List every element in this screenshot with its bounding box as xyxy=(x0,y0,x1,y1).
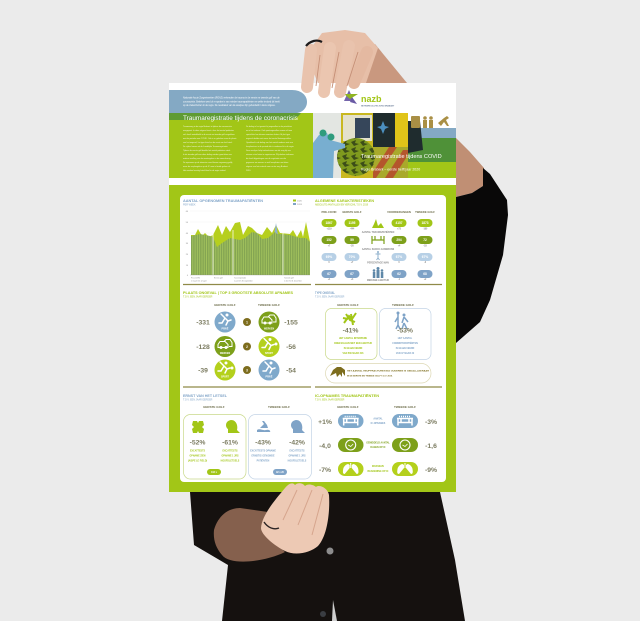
card: tweede golf: HOOFDLETSELS xyxy=(288,460,307,462)
row: mediane leeftijd: 67 xyxy=(350,272,354,276)
row: aantal shockroom: 59 xyxy=(350,238,354,242)
row: percentage man: -3 xyxy=(424,262,427,264)
panel: header intro xyxy=(169,90,313,178)
row: aantal traumapatienten: AANTAL TRAUMAPATIËNTEN xyxy=(362,231,395,234)
intro column left: aangepast. In deze uitgave leest u hoe het aantal patiënten xyxy=(183,129,234,132)
row: ic-opnames: AANTAL xyxy=(373,418,383,420)
row: aantal traumapatienten xyxy=(322,219,432,234)
logo: nazb xyxy=(361,94,382,104)
callout: fractures: IN DE EERSTE EN TWEEDE GOLF T.O.V. 2019. xyxy=(347,376,393,378)
intro column left: In de tweede golf was deze daling minder groot door een xyxy=(183,153,232,156)
row: percentage man: 69% xyxy=(326,255,332,259)
logo: NETWERK ACUTE ZORG BRABANT xyxy=(361,104,395,108)
card: eerste golf: -52% xyxy=(190,440,205,446)
row: aantal traumapatienten: -180 xyxy=(423,228,428,230)
card: tweede golf: EXCATTESTS xyxy=(289,450,305,452)
intro column left: Het aandeel ernstig letsel bleef in de regio stabiel. xyxy=(183,169,226,172)
row: mediane leeftijd xyxy=(322,267,432,282)
bar chart: Pre-COVID xyxy=(191,278,201,280)
intro column right: 2020. xyxy=(246,170,251,172)
bar chart: 60 xyxy=(186,211,189,213)
heading: ERNST VAN HET LETSEL xyxy=(183,394,228,398)
rank 3: PRIVÉ xyxy=(266,376,273,378)
column labels: VOORDERLINGEN xyxy=(387,210,411,214)
panel: ic-opnames traumapatienten xyxy=(315,394,437,476)
row: beademing: BEADEMING OP IC xyxy=(368,470,389,473)
row: aantal shockroom: +7 xyxy=(328,246,331,248)
row: mediane leeftijd: -1 xyxy=(398,279,401,281)
rank 2: SPORT xyxy=(265,353,274,355)
legend: 2020 xyxy=(297,200,303,202)
card: tweede golf: EXCATTESTS OPNAME xyxy=(250,450,276,452)
intro column right: De daling is het grootst bij ongevallen in de privésfeer xyxy=(246,125,292,128)
row: aantal shockroom: -53 xyxy=(423,246,427,248)
bar chart xyxy=(186,211,310,282)
card: tweede golf: -43% xyxy=(255,440,271,446)
card: tweede golf xyxy=(380,308,431,360)
subheading: ABSOLUTE AANTALLEN EN VERSCHIL T.O.V. 2019 xyxy=(315,204,369,206)
card: eerste golf: -61% xyxy=(222,440,238,446)
panel: plaats ongeval xyxy=(183,291,298,380)
panel: algemene karakteristieken xyxy=(315,199,435,282)
row: aantal shockroom xyxy=(322,236,432,251)
row: beademing: -7% xyxy=(319,467,331,474)
row: ic-opnames xyxy=(318,414,437,428)
row: beademing: INVASIEVE xyxy=(372,465,385,468)
top hand xyxy=(306,30,407,92)
card: eerste golf: VAN 536 NAAR 316 xyxy=(343,352,364,355)
bar chart: 1 maart t/m 12 april xyxy=(191,280,207,282)
row: mediane leeftijd: +4 xyxy=(351,278,354,281)
rank 3: -54 xyxy=(286,368,296,374)
cover photo icons xyxy=(411,116,449,128)
card: eerste golf xyxy=(184,414,246,479)
cover subtitle: Regio Brabant – eerste helft jaar 2020 xyxy=(361,168,420,172)
column labels: TWEEDE GOLF xyxy=(415,210,435,214)
row: opnameduur xyxy=(319,438,437,452)
intro column left: andere invulling van de maatregelen in de samenleving. xyxy=(183,157,231,160)
panel: ernst van het letsel xyxy=(183,394,312,479)
panel: white content xyxy=(180,195,446,482)
subheading: T.O.V. EEN JAAR EERDER xyxy=(315,296,345,298)
rank 2: -128 xyxy=(196,344,210,351)
panel: aantal opgenomen traumapatienten xyxy=(183,199,310,282)
intro column right: Opvallend is de daling van het aantal ouderen met een xyxy=(246,141,293,144)
row: aantal traumapatienten: 1867 xyxy=(325,221,333,225)
card: eerste golf: EXCATTESTS xyxy=(222,450,238,452)
intro column left: van het ongeval, het type letsel en de ernst van het letsel. xyxy=(183,141,233,144)
intro column right: heupfractuur in de periode die is onderzocht in de regio. xyxy=(246,145,294,148)
row: percentage man: 0 xyxy=(398,262,400,264)
intro column right: gegevens en wensen u veel leesplezier met deze xyxy=(246,161,288,164)
heading: IC-OPNAMES TRAUMAPATIËNTEN xyxy=(315,394,379,398)
column labels: EERSTE GOLF xyxy=(214,303,236,307)
row: percentage man: 67% xyxy=(396,255,402,259)
rank 2: WERKEN xyxy=(220,353,230,355)
intro column left: Tijdens de eerste golf daalde het aantal patiënten sterk. xyxy=(183,149,231,152)
person: torso and arm behind the poster xyxy=(190,130,508,621)
intro column left: Traumazorg in de regio Brabant is tijdens de coronacrisis xyxy=(183,125,232,128)
card: eerste golf: 102 x xyxy=(211,472,218,474)
card: eerste golf: OPNAME 1 JRS xyxy=(221,454,239,458)
row: mediane leeftijd: 67 xyxy=(327,272,331,276)
row: aantal traumapatienten: +73 xyxy=(397,228,402,230)
row: aantal traumapatienten: 1873 xyxy=(421,221,429,225)
intro column left: zich heeft ontwikkeld in de eerste en tweede golf vergeleken xyxy=(183,133,235,136)
bar chart: 0 xyxy=(187,275,189,277)
row: opnameduur: DAGEN OP IC xyxy=(370,446,386,449)
blue intro shape xyxy=(169,90,307,113)
intro text: op de ziekenhuizen in de regio. De resultaten van de analyse zijn gebundeld in deze uitgave. xyxy=(183,104,276,107)
panel: type ongeval: TWEEDE GOLF xyxy=(392,303,414,307)
card: tweede golf: -53% xyxy=(397,328,413,334)
rank 3: SPORT xyxy=(221,376,230,378)
rank 3 xyxy=(198,360,296,380)
logo xyxy=(344,90,395,108)
poster sheet xyxy=(169,83,456,492)
intro column right: Deze analyse helpt ziekenhuizen om de zorg bij een xyxy=(246,149,291,152)
card: tweede golf: ERNSTIG GEWONDE xyxy=(252,456,275,458)
heading: ALGEMENE KARAKTERISTIEKEN xyxy=(315,199,374,203)
card: tweede golf: 92 x 26 xyxy=(276,472,285,474)
intro column right: en in het verkeer. Ook sportongevallen namen af toen xyxy=(246,129,292,132)
row: aantal shockroom: 72 xyxy=(423,238,427,242)
bar chart: Tweede golf xyxy=(284,278,294,280)
row: ic-opnames: IC-OPNAMES xyxy=(371,422,386,425)
panel: ic-opnames traumapatienten: TWEEDE GOLF xyxy=(394,405,416,409)
section dividers xyxy=(183,284,442,387)
row: aantal traumapatienten: +119 xyxy=(326,228,332,230)
dark title band xyxy=(169,113,301,120)
title: Traumaregistratie tijdens de coronacrisis xyxy=(183,115,298,122)
intro column left: De opnames op de intensive care bleven nagenoeg gelijk, xyxy=(183,161,233,164)
column labels: PRE-COVID xyxy=(322,210,337,214)
intro column left: met de periode voor COVID. Ook is er gekeken naar de plaats xyxy=(183,137,236,140)
card: eerste golf: HET AANTAL INTERPERE xyxy=(339,337,368,340)
rank 3: -39 xyxy=(198,368,208,374)
subheading: T.O.V. EEN JAAR EERDER xyxy=(183,398,213,402)
row: mediane leeftijd: +1 xyxy=(328,279,331,281)
row: percentage man: 70% xyxy=(349,255,355,259)
row: mediane leeftijd: 68 xyxy=(423,272,427,276)
row: opnameduur: GEMIDDELD AANTAL xyxy=(366,442,390,444)
row: ic-opnames: -3% xyxy=(425,419,437,426)
intro column left: De cijfers komen uit de Landelijke Traumaregistratie. xyxy=(183,145,229,148)
card: tweede golf: PATIËNTEN xyxy=(257,460,270,462)
column labels: EERSTE GOLF xyxy=(337,303,359,307)
bar chart: 50 xyxy=(186,222,189,224)
row: aantal traumapatienten: 1195 xyxy=(349,221,356,225)
bar chart: 10 xyxy=(186,265,189,267)
row: percentage man: PERCENTAGE MAN xyxy=(367,262,389,264)
card: tweede golf: -42% xyxy=(289,440,305,446)
intro column left: maar de verpleegduur op de IC nam in beide golven af. xyxy=(183,166,231,168)
intro text: Nationale Acute Zorgnetwerken (ROAZ) verkenden de trauma in de eerste en tweede golf van de xyxy=(183,96,280,100)
bar chart: 1 okt t/m 31 december xyxy=(284,280,302,282)
intro column right: nieuwe crisis beter te organiseren. Wij danken iedereen xyxy=(246,153,294,156)
subheading: T.O.V. EEN JAAR EERDER xyxy=(183,296,213,298)
row: aantal shockroom: 294 xyxy=(396,238,402,242)
rank 1: 1 xyxy=(246,320,248,324)
column labels: EERSTE GOLF xyxy=(343,210,362,214)
row: percentage man: 0 xyxy=(328,262,330,264)
subheading: PER WEEK xyxy=(183,204,196,206)
row: percentage man xyxy=(322,251,432,264)
bar chart: 20 xyxy=(186,254,189,256)
row: aantal traumapatienten: 4157 xyxy=(395,221,403,225)
intro text: coronacrisis. Bekeken werd of er sprake is van minder traumapatiënten en welke invloed dit heeft xyxy=(183,100,280,103)
row: opnameduur: -1,6 xyxy=(425,443,437,450)
panel: ernst van het letsel: TWEEDE GOLF xyxy=(268,405,290,409)
card: eerste golf: (AISPE LE FIELD) xyxy=(188,460,207,462)
column labels xyxy=(322,210,435,214)
rank 3: 3 xyxy=(246,368,248,372)
heading: PLAATS ONGEVAL | TOP 3 GROOTSTE ABSOLUTE AFNAMES xyxy=(183,291,293,295)
card: eerste golf: EXCATTESTS xyxy=(190,450,205,452)
card: tweede golf: HET AANTAL xyxy=(398,337,413,340)
intro column right: uitgave van het netwerk voor acute zorg Brabant xyxy=(246,165,288,168)
panel: green infographic background xyxy=(169,185,456,492)
rank 2: -56 xyxy=(286,344,296,351)
card: eerste golf: HOOFDLETSELS xyxy=(221,460,240,462)
callout: fractures: HET AANTAL HEUPFRACTUREN BIJ OUDEREN IS GEDALLLEERAAR xyxy=(347,370,430,372)
card: eerste golf: -41% xyxy=(343,328,358,334)
card: eerste golf: OPNAME ZIEN xyxy=(190,454,206,458)
row: aantal shockroom: 152 xyxy=(326,238,332,242)
rank 1: -155 xyxy=(284,320,298,326)
row: aantal shockroom: AANTAL SHOCK-CAMERONS xyxy=(362,248,395,251)
row: percentage man: +7 xyxy=(351,262,354,264)
cover title: Traumaregistratie tijdens COVID xyxy=(361,154,442,160)
lime text area xyxy=(169,113,313,178)
card: tweede golf: OPNAME 1 JRS xyxy=(288,454,306,458)
bar chart: Tussenperiode xyxy=(234,278,246,280)
row: mediane leeftijd: MEDIANE LEEFTIJD xyxy=(367,279,389,282)
card: tweede golf: IS GEHALVEERD xyxy=(396,347,415,350)
rank 2: 2 xyxy=(246,345,248,349)
intro column right: sportclubs hun deuren moesten sluiten. Bij het type xyxy=(246,133,290,136)
card: eerste golf xyxy=(326,308,377,360)
row: mediane leeftijd: 62 xyxy=(397,272,401,276)
bottom hand xyxy=(214,483,329,562)
row: opnameduur: -4,0 xyxy=(319,443,331,450)
row: percentage man: 67% xyxy=(422,255,428,259)
row: aantal shockroom: -20 xyxy=(350,246,354,248)
intro column right: die heeft bijgedragen aan de registratie van de xyxy=(246,157,286,160)
legend: 2019 xyxy=(297,204,303,206)
card: tweede golf: VAN 47 NAAR 22 xyxy=(396,352,415,355)
bar chart: 40 xyxy=(186,233,189,235)
panel: type ongeval xyxy=(315,291,431,383)
panel: cover photo xyxy=(313,113,456,178)
row: beademing xyxy=(319,462,437,476)
heading: AANTAL OPGENOMEN TRAUMAPATIËNTEN xyxy=(183,199,263,203)
bar chart: 1 juni t/m 30 september xyxy=(234,280,253,282)
card: eerste golf: IS GEHALVEERD xyxy=(344,347,363,350)
column labels: EERSTE GOLF xyxy=(203,405,225,409)
card: tweede golf xyxy=(248,414,312,479)
row: beademing: -9% xyxy=(425,467,437,474)
bar chart: Eerste golf xyxy=(214,276,223,280)
column labels: EERSTE GOLF xyxy=(337,405,359,409)
row: mediane leeftijd: +2 xyxy=(424,279,427,281)
card: eerste golf: ONGEVALLEN MET EEN LEEFTIJD xyxy=(334,342,372,345)
legend xyxy=(293,200,303,206)
shirt buttons xyxy=(320,548,337,621)
intro column right: ongeval daalde met name het aantal fietsongevallen. xyxy=(246,137,292,140)
rank 1: PRIVÉ xyxy=(222,328,229,330)
heading: TYPE ONGEVAL xyxy=(315,291,335,295)
subheading: T.O.V. EEN JAAR EERDER xyxy=(315,398,345,402)
rank 1: WERKEN xyxy=(264,328,274,330)
panel: plaats ongeval: TWEEDE GOLF xyxy=(258,303,280,307)
card: tweede golf: COMMOTIOPATIËNTEN xyxy=(392,342,418,345)
rank 1: -331 xyxy=(196,320,210,326)
row: aantal shockroom: +4 xyxy=(398,244,401,248)
row: ic-opnames: +1% xyxy=(318,419,332,426)
row: aantal traumapatienten: -444 xyxy=(350,228,355,230)
rank 1 xyxy=(196,312,298,332)
rank 2 xyxy=(196,336,296,357)
callout: fractures xyxy=(326,364,431,383)
bar chart: 30 xyxy=(186,243,189,245)
